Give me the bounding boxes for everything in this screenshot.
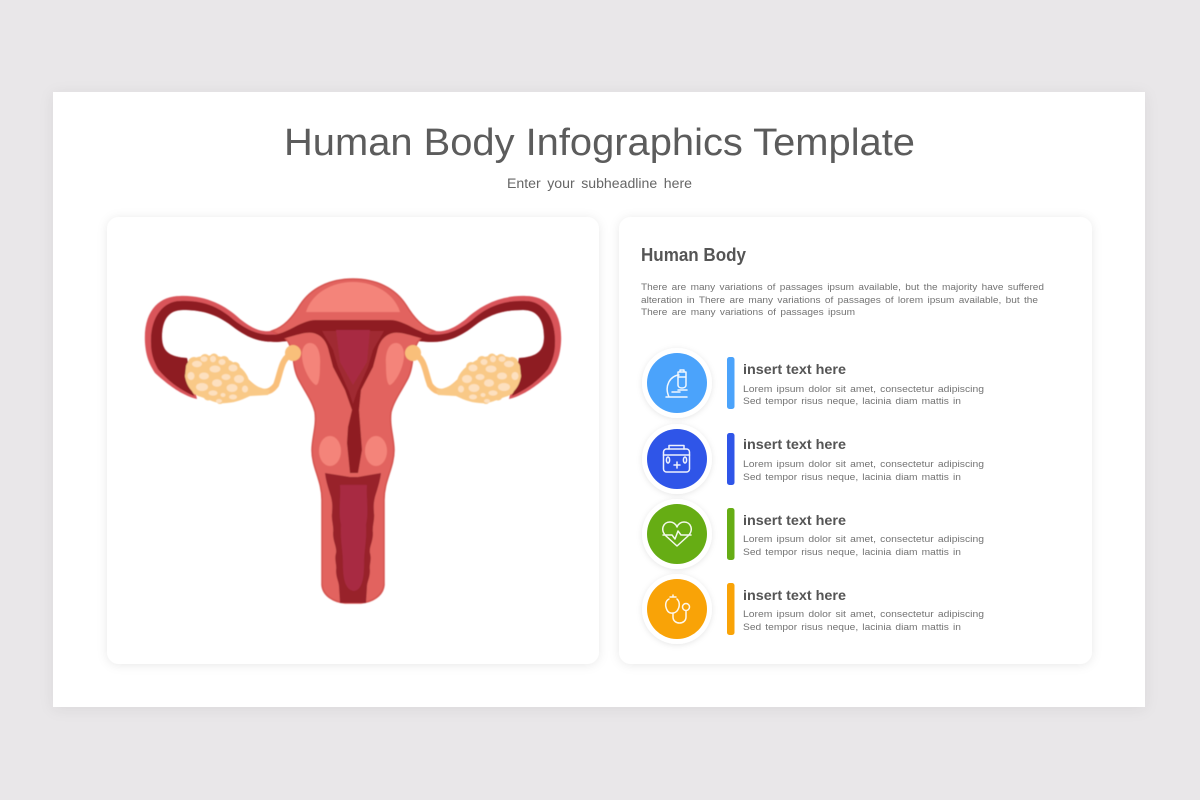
lower light ovals — [319, 436, 341, 466]
item text — [743, 361, 984, 407]
item text: Sed tempor risus neque, lacinia diam mattis in — [743, 547, 961, 558]
item 1: microscope — [642, 348, 984, 418]
accent bar — [727, 508, 734, 560]
item text: insert text here — [743, 587, 846, 603]
icon: heartbeat — [642, 499, 712, 569]
upper cavity — [274, 320, 432, 473]
item text: Lorem ipsum dolor sit amet, consectetur adipiscing — [743, 534, 984, 545]
item text — [743, 587, 984, 633]
item text: Lorem ipsum dolor sit amet, consectetur adipiscing — [743, 609, 984, 620]
right ovary — [405, 345, 521, 404]
item 4: stethoscope — [642, 574, 984, 644]
item text: Lorem ipsum dolor sit amet, consectetur adipiscing — [743, 384, 984, 395]
item text: Sed tempor risus neque, lacinia diam mattis in — [743, 396, 961, 407]
right tube — [406, 296, 561, 399]
accent bar — [727, 357, 734, 409]
vaginal canal — [325, 473, 381, 603]
uterus body — [272, 279, 434, 603]
accent bar — [727, 583, 734, 635]
item 3: heart — [642, 499, 984, 569]
accent bar — [727, 433, 734, 485]
icon: microscope — [642, 348, 712, 418]
paragraph: There are many variations of passages ipsum — [641, 307, 855, 318]
paragraph: alteration in There are many variations of passages of lorem ipsum available, but the — [641, 295, 1038, 306]
upper light ovals — [302, 343, 320, 385]
upper cavity lining — [336, 330, 370, 385]
left ovary — [185, 345, 301, 404]
panel: text card — [619, 217, 1092, 664]
title: Human Body Infographics Template — [284, 122, 915, 164]
item text: Lorem ipsum dolor sit amet, consectetur adipiscing — [743, 459, 984, 470]
item text: insert text here — [743, 361, 846, 377]
item text: Sed tempor risus neque, lacinia diam mattis in — [743, 472, 961, 483]
icon: medical kit — [642, 424, 712, 494]
item 2: medical kit — [642, 424, 984, 494]
canal lining — [340, 485, 367, 591]
item text: Sed tempor risus neque, lacinia diam mattis in — [743, 622, 961, 633]
item text — [743, 436, 984, 483]
paragraph — [641, 282, 1044, 318]
heading: human body: Human Body — [641, 245, 746, 265]
left tube — [145, 296, 300, 399]
paragraph: There are many variations of passages ipsum available, but the majority have suffered — [641, 282, 1044, 293]
upper cavity inner — [322, 331, 384, 404]
panel: illustration card — [107, 217, 599, 664]
slide background — [53, 92, 1145, 707]
fundus highlight — [306, 282, 400, 312]
icon: stethoscope — [642, 574, 712, 644]
item text: insert text here — [743, 436, 846, 452]
subtitle: Enter your subheadline here — [507, 176, 692, 191]
illustration: uterus and ovaries — [145, 279, 561, 603]
item text — [743, 512, 984, 558]
item text: insert text here — [743, 512, 846, 528]
